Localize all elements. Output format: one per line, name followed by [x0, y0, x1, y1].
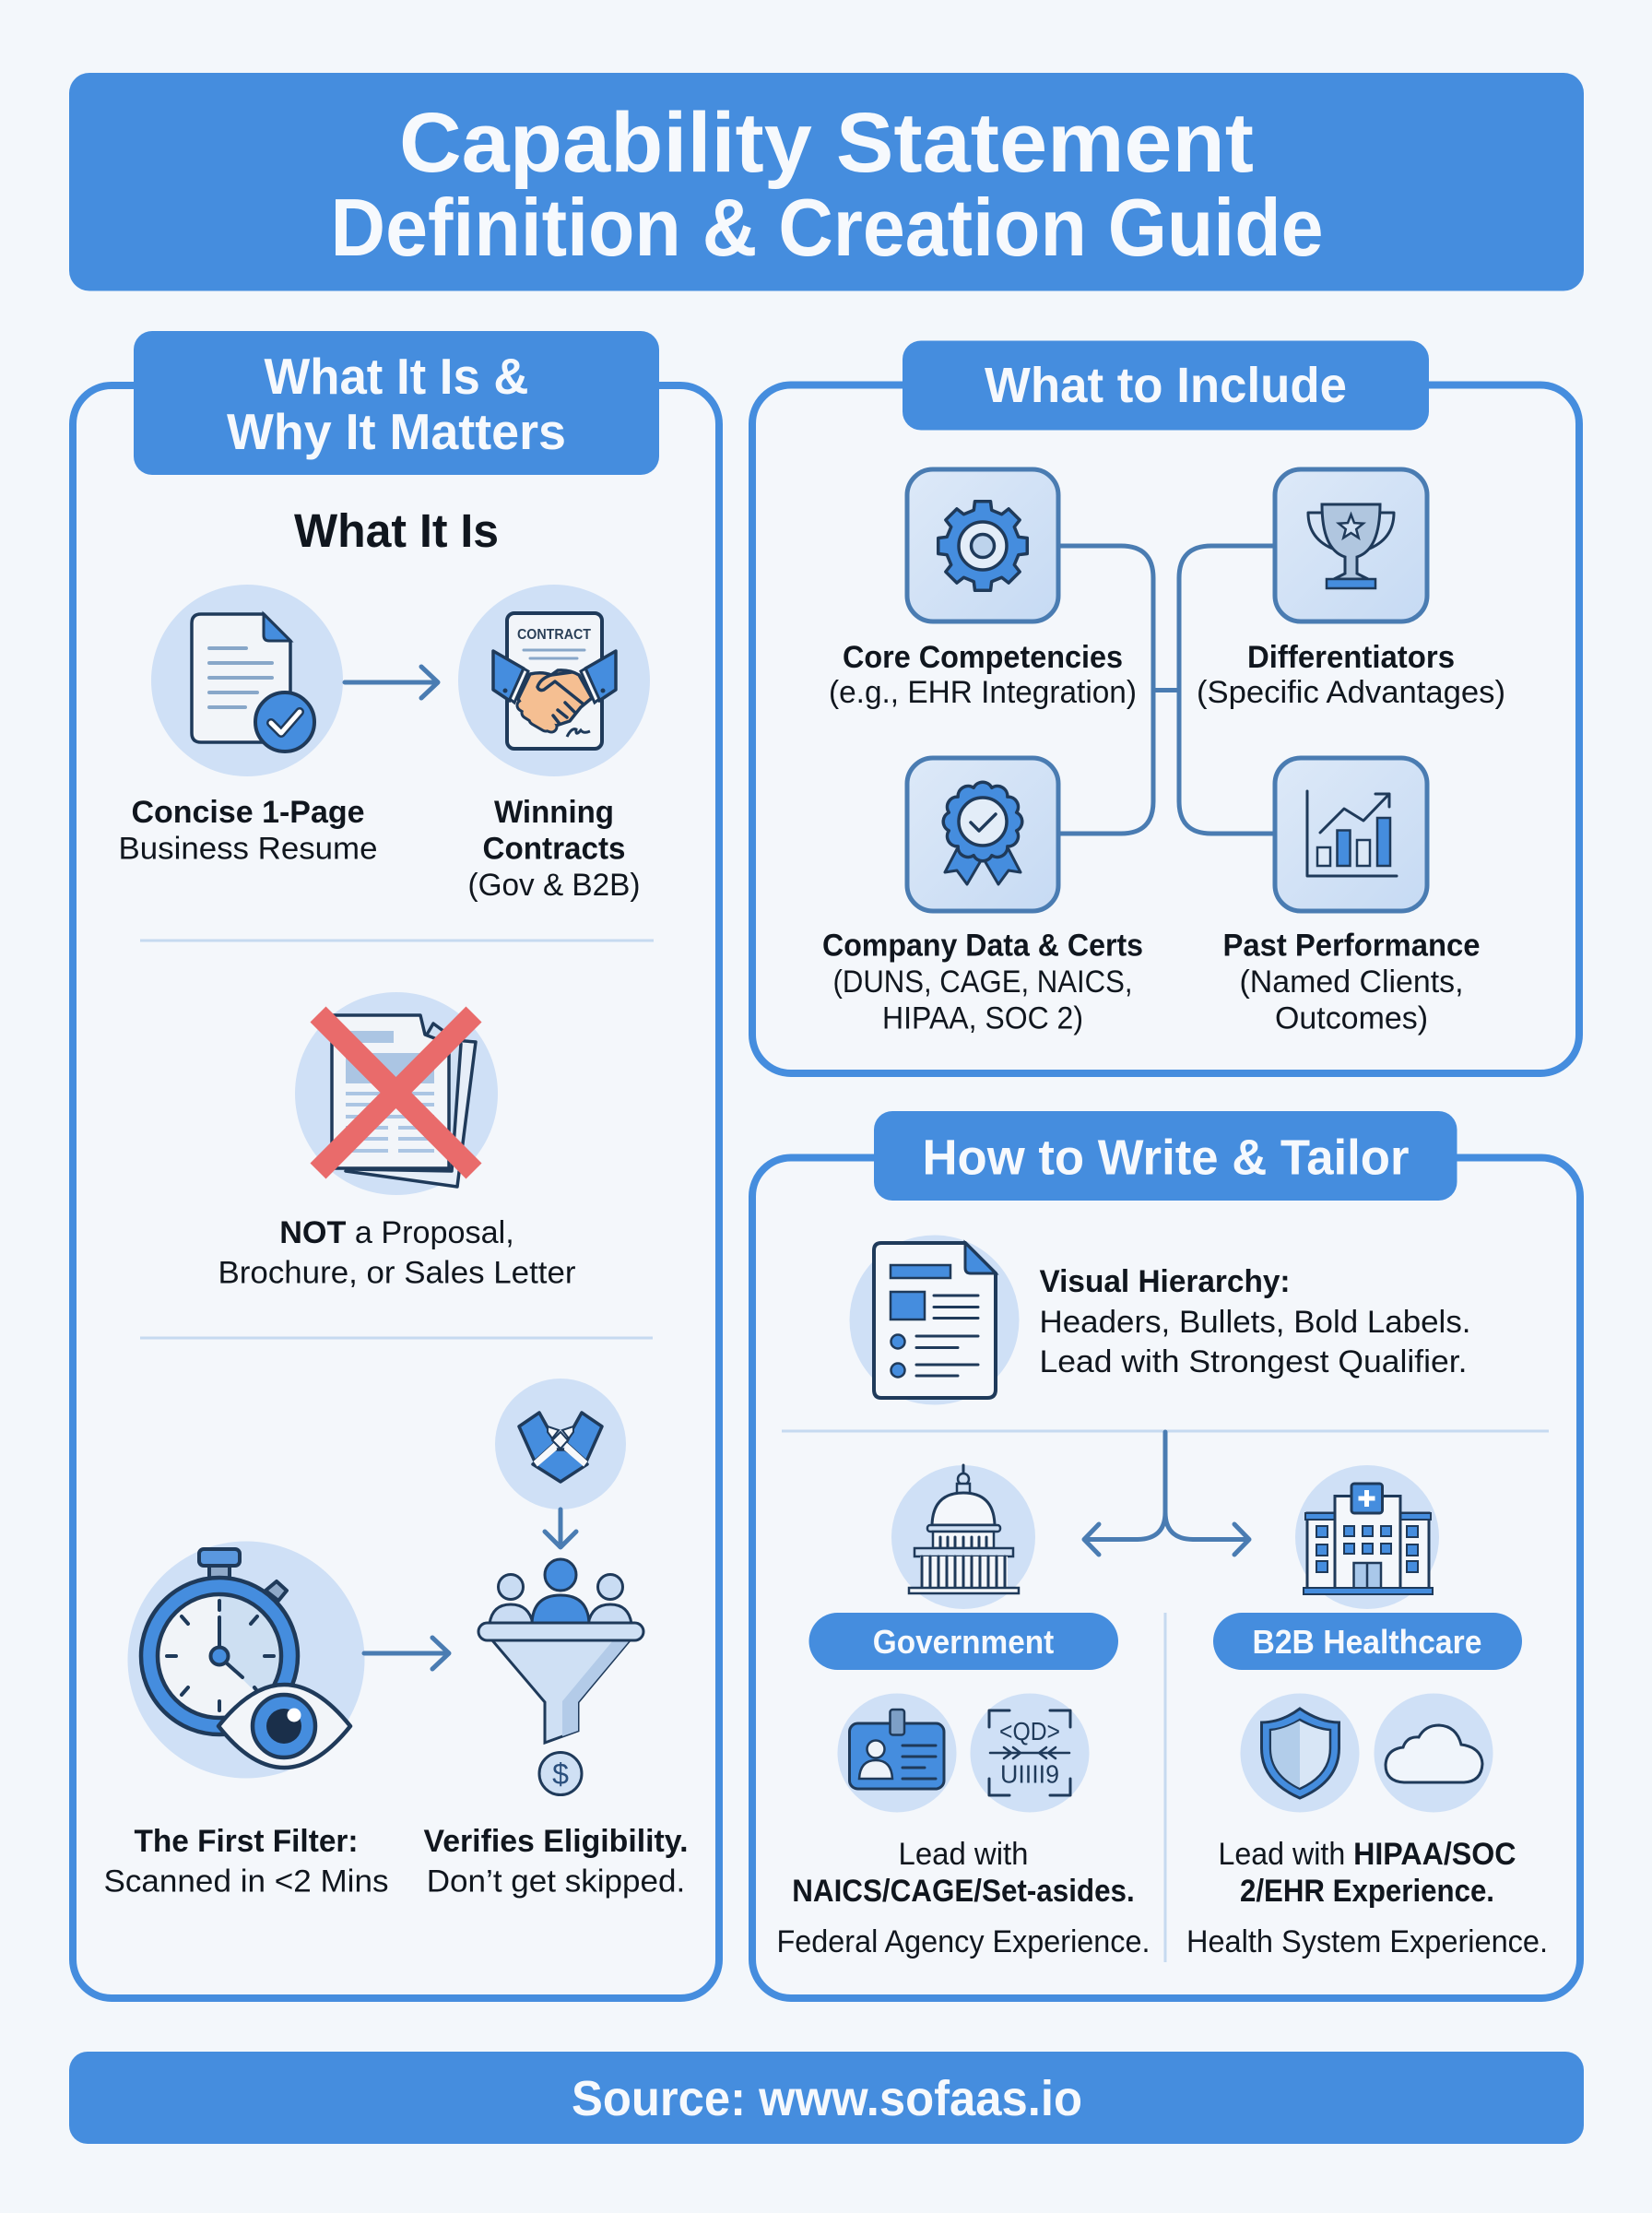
icon: barcode scan: UIIII9 — [1000, 1759, 1059, 1789]
panel: how to write and tailor — [752, 1111, 1580, 1998]
arrow: down into funnel — [545, 1509, 576, 1547]
panel heading: Why It Matters — [227, 403, 566, 460]
label: core competencies — [829, 640, 1137, 710]
icon: id badge — [837, 1693, 957, 1813]
label: not a proposal — [218, 1215, 575, 1291]
label: concise one-page resume — [118, 795, 378, 867]
icon tile: bar chart — [1275, 758, 1427, 911]
label: concise one-page resume: Business Resume — [118, 832, 378, 867]
footer banner — [69, 2052, 1584, 2144]
panel heading — [134, 331, 659, 475]
label: company data and certs: (DUNS, CAGE, NAICS, — [833, 964, 1132, 1000]
icon: stopwatch and eye — [127, 1542, 365, 1778]
icon: hospital — [1295, 1465, 1439, 1609]
panel heading: What to Include — [985, 358, 1347, 413]
text: healthcare guidance — [1186, 1837, 1548, 1959]
text: healthcare guidance: 2/EHR Experience. — [1240, 1874, 1494, 1909]
panel heading: What It Is & — [264, 348, 529, 405]
text: visual hierarchy: Lead with Strongest Qualifier. — [1040, 1344, 1468, 1379]
arrow: split to government and healthcare — [1084, 1432, 1249, 1555]
text: healthcare guidance: Health System Experience. — [1186, 1924, 1548, 1959]
icon: structured document — [850, 1236, 1020, 1405]
panel: what it is and why it matters — [73, 331, 719, 1998]
label: not a proposal: NOT a Proposal, — [279, 1215, 514, 1250]
text: visual hierarchy — [1040, 1264, 1471, 1379]
text: healthcare guidance: Lead with HIPAA/SOC — [1219, 1837, 1516, 1872]
icon: capitol building — [891, 1465, 1035, 1609]
label: winning contracts: Winning — [494, 795, 614, 830]
label: differentiators — [1197, 640, 1505, 710]
icon tile: gear — [907, 469, 1058, 621]
label: company data and certs: HIPAA, SOC 2) — [882, 1001, 1083, 1036]
label: the first filter: Scanned in <2 Mins — [103, 1864, 389, 1899]
icon: document with check — [151, 585, 343, 776]
label: past performance: Past Performance — [1222, 928, 1481, 963]
text: government guidance: Federal Agency Experience. — [776, 1924, 1150, 1959]
text: visual hierarchy: Headers, Bullets, Bold Labels. — [1040, 1305, 1471, 1340]
connector lines — [1058, 546, 1275, 834]
arrow: resume to contracts — [345, 667, 438, 698]
label: company data and certs: Company Data & Certs — [822, 928, 1143, 963]
label: core competencies: Core Competencies — [843, 640, 1123, 675]
label: past performance — [1222, 928, 1481, 1036]
label: past performance: Outcomes) — [1275, 1001, 1428, 1036]
label: not a proposal: Brochure, or Sales Letter — [218, 1256, 575, 1291]
pill: government: Government — [873, 1623, 1054, 1661]
label: the first filter — [103, 1824, 389, 1899]
text: government guidance: NAICS/CAGE/Set-asides. — [792, 1874, 1135, 1909]
label: the first filter: The First Filter: — [135, 1824, 358, 1859]
label: concise one-page resume: Concise 1-Page — [131, 795, 365, 830]
label: differentiators: Differentiators — [1247, 640, 1455, 675]
icon: barcode scan: <QD> — [999, 1717, 1060, 1746]
label: core competencies: (e.g., EHR Integration) — [829, 675, 1137, 710]
header banner — [69, 73, 1584, 291]
icon: people funnel — [478, 1559, 643, 1794]
pill: b2b healthcare: B2B Healthcare — [1252, 1623, 1482, 1661]
pill: b2b healthcare — [1213, 1613, 1522, 1670]
label: winning contracts: Contracts — [483, 832, 625, 867]
arrow: filter to funnel — [364, 1638, 449, 1669]
label: company data and certs — [822, 928, 1143, 1036]
icon: contract handshake — [458, 585, 650, 776]
label: differentiators: (Specific Advantages) — [1197, 675, 1505, 710]
icon: crossed out documents — [295, 992, 498, 1195]
icon: people funnel: $ — [552, 1757, 569, 1791]
text: government guidance — [776, 1837, 1150, 1959]
footer banner: Source: www.sofaas.io — [572, 2071, 1082, 2126]
panel: what to include — [752, 341, 1579, 1073]
icon: shield — [1241, 1693, 1359, 1813]
icon: small handshake — [495, 1379, 626, 1509]
icon tile: trophy — [1275, 469, 1427, 621]
panel heading — [874, 1111, 1457, 1201]
title — [330, 96, 1324, 273]
label: past performance: (Named Clients, — [1239, 964, 1464, 1000]
pill: government — [809, 1613, 1118, 1670]
label: verifies eligibility — [424, 1824, 688, 1899]
label: verifies eligibility: Verifies Eligibility. — [424, 1824, 688, 1859]
icon: cloud — [1374, 1693, 1493, 1813]
text: government guidance: Lead with — [898, 1837, 1029, 1872]
text: visual hierarchy: Visual Hierarchy: — [1040, 1264, 1291, 1299]
title: Definition & Creation Guide — [330, 182, 1324, 273]
panel heading — [903, 341, 1429, 430]
label: verifies eligibility: Don’t get skipped. — [427, 1864, 685, 1899]
subheading: what it is: What It Is — [294, 504, 499, 557]
title: Capability Statement — [399, 96, 1254, 190]
icon: barcode scan — [970, 1693, 1090, 1813]
icon: contract handshake: CONTRACT — [517, 627, 591, 643]
label: winning contracts — [468, 795, 640, 903]
panel heading: How to Write & Tailor — [922, 1130, 1409, 1186]
label: winning contracts: (Gov & B2B) — [468, 868, 640, 903]
icon tile: award ribbon — [907, 758, 1058, 911]
